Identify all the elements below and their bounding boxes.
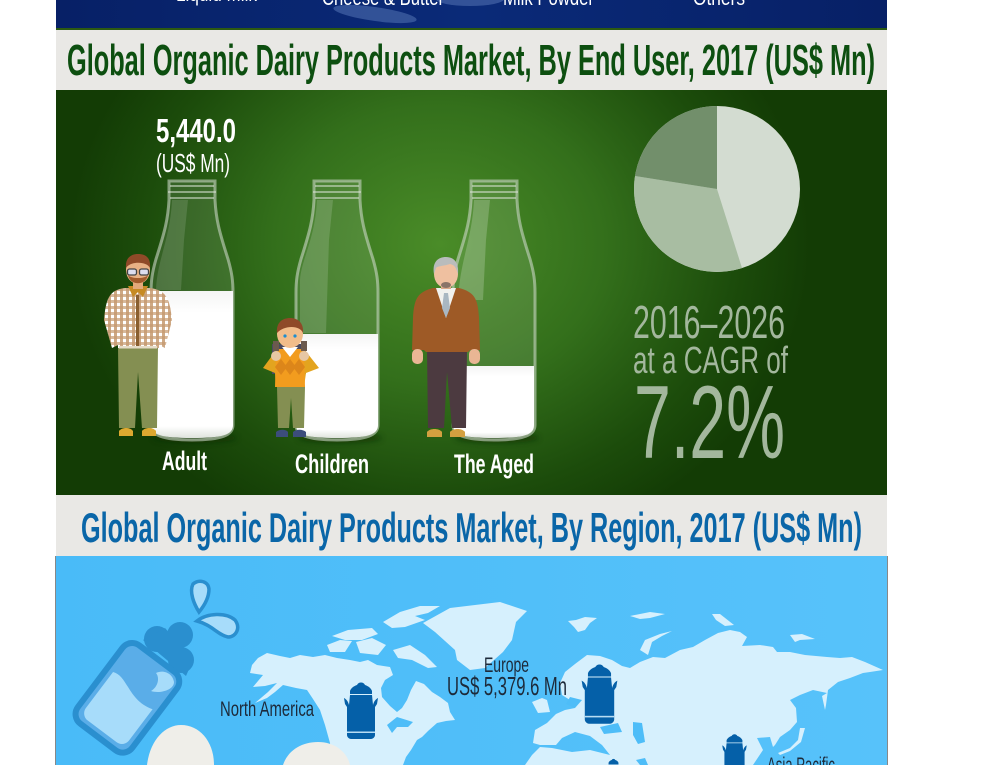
value callout: adult	[156, 112, 236, 178]
panel borders	[56, 556, 888, 765]
white eggs	[147, 725, 350, 765]
milk can: middle east	[608, 758, 618, 765]
panel: end user	[56, 90, 887, 495]
world map	[250, 602, 883, 765]
category labels	[162, 446, 534, 479]
milk drops	[192, 581, 238, 637]
milk can: asia pacific	[722, 734, 747, 765]
region labels	[220, 654, 835, 765]
bottle: the aged	[453, 181, 539, 443]
category labels: Children	[295, 449, 369, 479]
CAGR callout: 7.2%	[634, 365, 785, 481]
milk can: north america	[344, 683, 378, 739]
heading: region	[56, 495, 887, 556]
panel: region	[56, 556, 887, 765]
milk can: europe	[582, 664, 617, 724]
panel: product type band	[56, 0, 887, 28]
bottle: children	[296, 181, 382, 443]
region labels: US$ 5,379.6 Mn	[447, 671, 567, 701]
value callout: adult: (US$ Mn)	[156, 148, 230, 178]
region labels: North America	[220, 698, 314, 721]
person: child	[263, 318, 319, 437]
CAGR callout: at a CAGR of	[633, 340, 788, 382]
category labels: The Aged	[454, 449, 534, 479]
inland seas	[387, 697, 648, 765]
baby bottle	[71, 581, 238, 757]
region labels: Europe	[484, 654, 529, 677]
category labels: Adult	[162, 446, 207, 476]
pie chart	[634, 106, 800, 272]
value callout: adult: 5,440.0	[156, 112, 236, 149]
person: adult	[104, 254, 172, 436]
product type labels	[176, 0, 745, 10]
CAGR callout	[633, 296, 788, 481]
bottle: adult	[151, 181, 237, 443]
person: the aged	[412, 257, 480, 437]
CAGR callout: 2016–2026	[633, 296, 785, 348]
